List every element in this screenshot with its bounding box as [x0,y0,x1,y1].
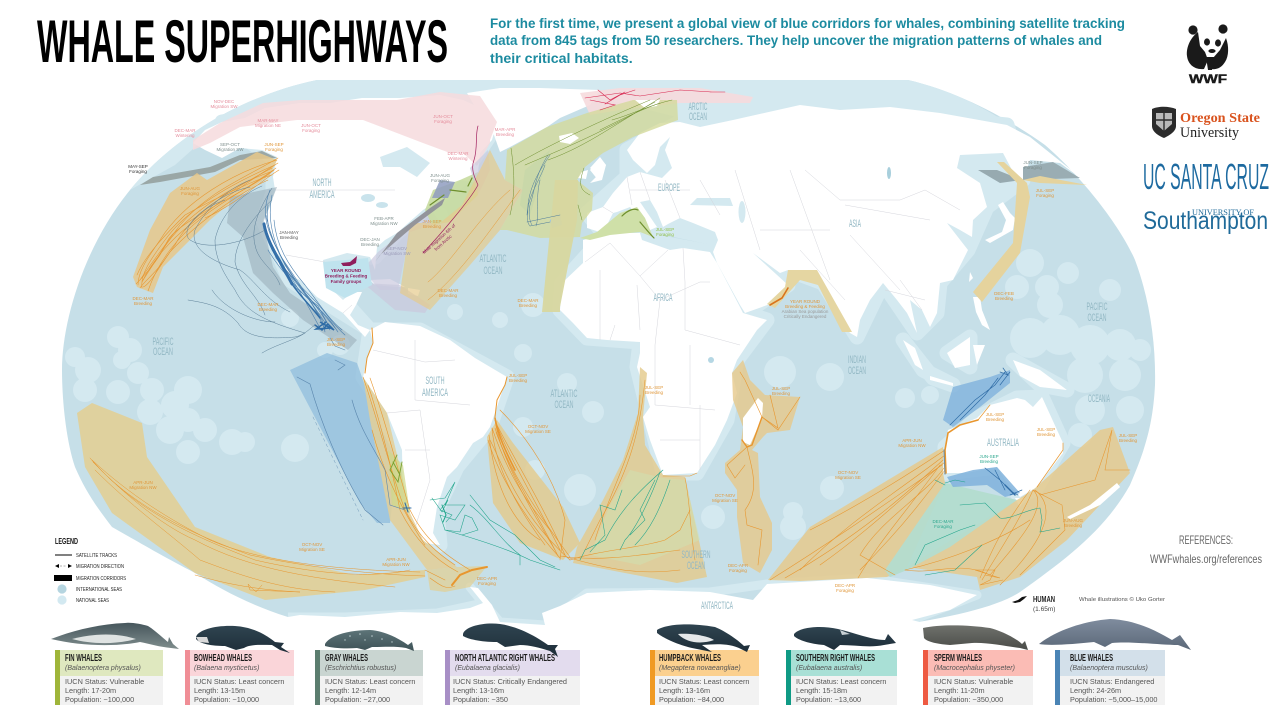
blue whale corridor [227,187,357,350]
intro text: their critical habitats. [490,51,633,67]
corridor labels: MAR-APR [495,127,516,132]
corridor labels: JUN-AUG [180,186,200,191]
fin whale Mediterranean corridor [580,207,653,240]
world map: OCEANIA [1088,393,1110,405]
card: blue whales: BLUE WHALES [1070,652,1113,664]
card: fin whales: FIN WHALES [65,652,102,664]
Arabian Sea humpback population [770,288,788,305]
corridor labels: DEC-APR [835,583,856,588]
legend: migration direction: MIGRATION DIRECTION [76,564,124,570]
card: bowhead whales: BOWHEAD WHALES [194,652,252,664]
right whale migration track [423,126,478,253]
corridor labels: Breeding [361,242,380,247]
card: blue whales: (Balaenoptera musculus) [1070,665,1148,672]
card: southern right whales: IUCN Status: Least concern [796,677,886,686]
corridor labels: OCT-NOV [302,542,322,547]
corridor labels: Breeding [1064,523,1083,528]
card: humpback whales: Length: 13-16m [659,686,710,695]
card: North Atlantic right whales: Length: 13-16m [453,686,504,695]
South America west coast tracks [363,377,470,572]
card: fin whales: Population: ~100,000 [65,695,134,704]
corridor labels: JUN-SEP [1023,160,1043,165]
humpback Madagascar corridor [725,360,800,573]
card: fin whales [51,623,179,705]
legend: national seas: NATIONAL SEAS [76,598,109,604]
corridor labels: Foraging [181,191,199,196]
corridor labels: DEC-MAR [932,519,954,524]
land [193,88,1120,660]
corridor labels: Foraging [129,169,147,174]
blue whale North Atlantic area [550,212,562,228]
corridor labels: JUN-SEP [264,142,284,147]
corridor labels: Wintering [448,156,468,161]
corridor labels: Foraging [302,128,320,133]
South Atlantic east tracks [560,380,697,572]
corridor labels: SEP-NOV [387,246,407,251]
corridor labels: Breeding [980,459,999,464]
card: southern right whales [786,627,897,705]
corridor labels: FEB-APR [374,216,394,221]
logo: Oregon State University [1152,107,1260,141]
card: southern right whales: (Eubalaena australis) [796,665,862,672]
corridor labels: Foraging [434,119,452,124]
Pacific coast of South America corridor [363,377,457,570]
corridor labels: DEC-MAR [518,298,539,303]
card: gray whales: Population: ~27,000 [325,695,390,704]
fin whale North Atlantic corridor [500,100,678,238]
satellite tracks [90,90,1130,592]
card: humpback whales: (Megaptera novaeangliae) [659,665,741,672]
lakes and inland seas [361,147,891,363]
place labels: EUROPE [658,182,680,194]
place labels: NORTH [312,177,332,189]
corridor labels: JUL-SEP [327,337,345,342]
human scale [1012,595,1055,613]
corridors [77,88,1130,600]
North Atlantic fin whale tracks [510,98,672,220]
blue whale Southern Australia corridor [947,467,1020,497]
corridor labels: DEC-MAR [174,128,196,133]
logo: WWF [1187,24,1228,86]
whale: blue [1039,619,1191,650]
card: southern right whales: SOUTHERN RIGHT WHALES [796,652,875,664]
Arctic ice [635,100,660,108]
corridor labels: Breeding & Feeding [785,304,825,309]
NE Pacific humpback tracks [136,158,279,291]
corridor labels: Breeding [645,390,664,395]
corridor labels: Migration SW [216,147,244,152]
references [1150,533,1262,566]
corridor labels: Migration SE [712,498,738,503]
corridor labels: DEC-MAR [438,288,459,293]
corridor labels: JUL-SEP [1119,433,1137,438]
card: humpback whales: IUCN Status: Least concern [659,677,749,686]
corridor labels: Breeding [772,391,791,396]
intro text [490,16,1125,67]
place labels: SOUTHERN [682,549,711,561]
Arctic bowhead tracks [585,90,725,110]
corridor labels: JUN-SEP [979,454,999,459]
whale: sperm [923,625,1028,650]
corridor labels: Foraging [1024,165,1042,170]
place labels: OCEAN [1088,312,1107,324]
humpback NE Pacific corridor [133,152,277,293]
place labels: OCEAN [848,365,866,377]
place labels: PACIFIC [1086,301,1108,313]
corridor labels: Breeding [259,307,278,312]
human scale: (1.65m) [1033,606,1055,613]
whale: bowhead [196,626,290,653]
Antarctic Peninsula foraging corridor [427,566,487,592]
corridor labels: APR-JUN [386,557,406,562]
card: fin whales: Length: 17-20m [65,686,116,695]
fin whale West Africa corridor [542,180,578,312]
corridor labels: Migration NW [382,562,410,567]
Mozambique island [743,398,763,445]
Gulf of Mexico right whale blob [323,258,372,298]
legend: LEGEND [55,536,78,546]
card: humpback whales [650,624,759,705]
place labels: AMERICA [310,189,335,201]
whale: gray [325,630,414,651]
corridor labels: Male migration 6th of [422,222,457,255]
card: North Atlantic right whales: NORTH ATLANTIC RIGHT WHALES [455,652,555,664]
Brazil humpback tracks [488,410,570,560]
national seas [65,80,1151,540]
whale: fin [51,623,179,649]
place labels: OCEAN [687,560,705,572]
corridor labels: DEC-JAN [360,237,380,242]
card: bowhead whales: Length: 13-15m [194,686,245,695]
whale: North Atlantic right [463,623,558,657]
corridor labels: Foraging [729,568,747,573]
place labels: AUSTRALIA [987,437,1019,449]
place labels: OCEAN [153,346,173,358]
corridor labels: JUL-SEP [986,412,1004,417]
place labels: INDIAN [848,354,866,366]
corridor labels: DEC-MAR [448,151,469,156]
corridor labels: MAY-SEP [128,164,148,169]
gray whale West Pacific corridor [978,170,1022,183]
North Atlantic blue whale tracks [527,155,560,226]
corridor labels: Migration SE [835,475,861,480]
corridor labels: YEAR ROUND [331,268,362,273]
card: fin whales: (Balaenoptera physalus) [65,665,141,672]
card: gray whales: (Eschrichtius robustus) [325,665,396,672]
corridor labels: YEAR ROUND [790,299,821,304]
place labels: OCEAN [689,111,707,123]
borders [275,170,960,528]
corridor labels: JAN-SEP [422,219,442,224]
humpback Arabian Sea corridor [767,270,852,332]
card: North Atlantic right whales [445,623,580,705]
corridor labels: Breeding [986,417,1005,422]
blue whale Indonesia corridor [943,370,1010,427]
title: WHALE SUPERHIGHWAYS [37,8,448,75]
corridor labels: Migration SE [299,547,325,552]
corridor labels: Foraging [934,524,952,529]
card: southern right whales: Length: 15-18m [796,686,847,695]
corridor labels: APR-JUN [902,438,922,443]
card: blue whales: Population: ~5,000–15,000 [1070,695,1157,704]
card: North Atlantic right whales: IUCN Status: Critically Endangered [453,677,567,686]
whale: southern right [794,627,896,650]
humpback North Atlantic corridor [400,150,523,310]
corridor labels: Migration SE [525,429,551,434]
world map [62,80,1155,660]
logo: WWF: WWF [1189,74,1227,86]
corridor labels: JUL-SEP [645,385,663,390]
Madagascar humpback tracks [727,372,800,565]
humpback West Pacific corridor [973,162,1030,302]
card: fin whales: IUCN Status: Vulnerable [65,677,144,686]
corridor labels: Migration NW [898,443,926,448]
intro text: data from 845 tags from 50 researchers. They help uncover the migration patterns of whales and [490,33,1102,49]
gray whale corridor [140,151,277,185]
legend: international seas: INTERNATIONAL SEAS [76,587,122,593]
card: sperm whales [923,625,1033,705]
illustration credit: Whale illustrations © Uko Gorter [1079,596,1165,603]
corridor labels: Foraging [431,178,449,183]
corridor labels: Critically Endangered [784,314,827,319]
place labels: ANTARCTICA [701,600,733,612]
corridor labels: APR-JUN [133,480,153,485]
corridor labels: JUN-OCT [433,114,453,119]
corridor labels: Breeding [496,132,515,137]
card: sperm whales: Population: ~350,000 [934,695,1003,704]
Teal Atlantic tracks [430,470,670,570]
north right whale dark area [432,180,455,198]
corridor labels: Breeding [1119,438,1138,443]
corridor labels: Foraging [478,581,496,586]
humpback SE Pacific corridor [77,403,425,600]
southern right whale Australia corridor [885,483,1017,577]
corridor labels: Breeding [134,301,153,306]
NE Pacific blue whale tracks [264,190,345,335]
place labels: ASIA [849,218,861,230]
corridor labels: SEP-OCT [220,142,240,147]
corridor labels: Foraging [265,147,283,152]
corridor labels: DEC-MAR [132,296,154,301]
card: sperm whales: Length: 11-20m [934,686,985,695]
card: bowhead whales [185,626,294,705]
corridor labels: Foraging [656,232,674,237]
legend: satellite tracks: SATELLITE TRACKS [76,553,117,559]
corridor labels: JUN-AUG [1063,518,1083,523]
place labels: PACIFIC [152,336,174,348]
corridor labels: Migration NW [129,485,157,490]
card: bowhead whales: Population: ~10,000 [194,695,259,704]
corridor labels: DEC-APR [477,576,498,581]
corridor labels: Breeding [280,235,299,240]
North Atlantic right whale corridor [362,208,440,290]
humpback South Atlantic corridor [573,367,707,583]
humpback Brazil corridor [487,420,580,560]
corridor labels: Breeding [1037,432,1056,437]
Indonesia and Australia blue whale tracks [950,368,1022,495]
SE Pacific blue corridor [290,353,397,523]
card: humpback whales: Population: ~84,000 [659,695,724,704]
SE Pacific humpback tracks [90,458,425,592]
corridor labels: Foraging [1036,193,1054,198]
coastal halo [222,95,1067,625]
corridor labels: Migration SW [210,104,238,109]
card: blue whales [1039,619,1191,705]
card: sperm whales: IUCN Status: Vulnerable [934,677,1013,686]
place labels: ATLANTIC [550,388,578,400]
intro text: For the first time, we present a global view of blue corridors for whales, combining satellite tracking [490,16,1125,32]
place labels: AFRICA [654,292,673,304]
corridor labels: Migration NE [255,123,281,128]
Australia humpback tracks [770,430,1130,585]
corridor labels [128,99,1138,593]
corridor labels: DEC-APR [728,563,749,568]
logo: University of Southampton: UNIVERSITY OF [1192,207,1254,217]
corridor labels: JAN-MAY [279,230,299,235]
card: gray whales: GRAY WHALES [325,652,368,664]
New Zealand over corridor [1067,483,1120,519]
card: blue whales: Length: 24-26m [1070,686,1121,695]
logo: Oregon State University: University [1180,125,1239,141]
year-round Gulf population [341,256,357,266]
place labels: SOUTH [426,375,445,387]
card: gray whales [315,630,423,705]
place labels: OCEAN [554,399,574,411]
corridor labels: Breeding [995,296,1014,301]
corridor labels: MAR-MAY [258,118,278,123]
corridor labels: Wintering [175,133,195,138]
corridor labels: Breeding & Feeding [325,274,367,278]
place labels: ARCTIC [688,101,708,113]
place labels: ATLANTIC [480,253,507,265]
legend [54,536,126,605]
corridor labels: JUN-OCT [301,123,321,128]
place labels: OCEAN [484,265,503,277]
corridor labels: JUL-SEP [772,386,790,391]
card: humpback whales: HUMPBACK WHALES [659,652,721,664]
corridor labels: Breeding [327,342,346,347]
card: blue whales: IUCN Status: Endangered [1070,677,1154,686]
corridor labels: Breeding [439,293,458,298]
corridor labels: Foraging [836,588,854,593]
references: REFERENCES: [1179,533,1233,547]
card: bowhead whales: IUCN Status: Least concern [194,677,284,686]
corridor labels: DEC-MAR [258,302,279,307]
card: North Atlantic right whales: Population: ~350 [453,695,508,704]
ocean [62,80,1155,643]
place labels: AMERICA [422,387,448,399]
corridor labels: Breeding [509,378,528,383]
humpback Australia corridor [768,447,945,581]
whale: humpback [657,624,750,652]
corridor labels: JUL-SEP [1037,427,1055,432]
human scale: HUMAN [1033,595,1055,604]
North Atlantic humpback tracks [428,190,520,300]
corridor labels: OCT-NOV [528,424,548,429]
card: bowhead whales: (Balaena mysticetus) [194,665,259,672]
corridor labels: Breeding [519,303,538,308]
corridor labels: JUL-SEP [656,227,674,232]
corridor labels: Migration SW [383,251,411,256]
corridor labels: DEC-FEB [994,291,1014,296]
card: sperm whales: SPERM WHALES [934,652,982,664]
legend: migration corridors: MIGRATION CORRIDORS [76,576,126,582]
corridor labels: from Arctic [433,233,453,252]
corridor labels: JUL-SEP [509,373,527,378]
corridor labels: Arabian Sea population [782,309,829,314]
corridor labels: JUN-AUG [430,173,450,178]
corridor labels: JUL-SEP [1036,188,1054,193]
Australia teal tracks [915,480,1060,575]
bowhead corridor [193,92,497,166]
card: North Atlantic right whales: (Eubalaena glacialis) [455,665,520,672]
logo: Oregon State University: Oregon State [1180,111,1260,126]
card: gray whales: Length: 12-14m [325,686,376,695]
corridor labels: OCT-NOV [838,470,858,475]
corridor labels: Breeding [423,224,442,229]
card: gray whales: IUCN Status: Least concern [325,677,415,686]
Pacific coast blue tracks [297,338,405,525]
corridor labels: Family groups [331,279,362,284]
corridor labels: NOV-DEC [214,99,235,104]
card: sperm whales: (Macrocephalus physeter) [934,665,1015,672]
corridor labels: OCT-NOV [715,493,735,498]
place labels [152,101,1110,612]
card: southern right whales: Population: ~13,600 [796,695,861,704]
corridor labels: Migration NW [370,221,398,226]
